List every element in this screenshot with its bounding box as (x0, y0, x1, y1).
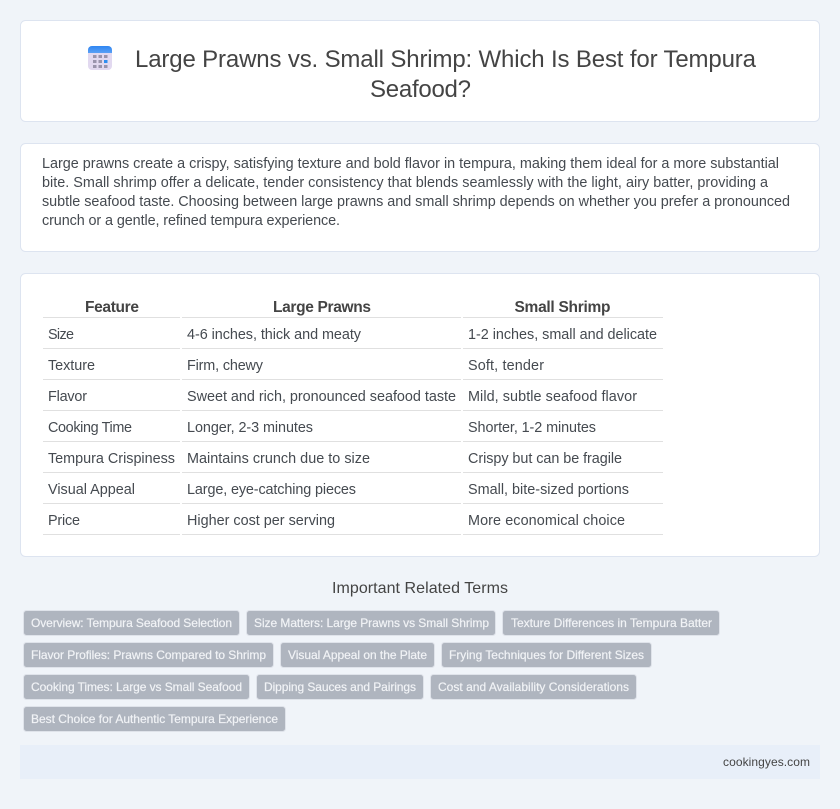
row: texture: Soft, tender (468, 358, 544, 374)
tag: overview: Overview: Tempura Seafood Selection (31, 616, 232, 630)
row: visual appeal: Visual Appeal (48, 482, 135, 498)
tag: frying techniques: Frying Techniques for Different Sizes (449, 648, 644, 662)
tag: best choice: Best Choice for Authentic Tempura Experience (31, 712, 278, 726)
title: Seafood? (370, 76, 471, 103)
row: tempura crispiness (48, 451, 622, 467)
panel: introduction text: Large prawns create a crispy, satisfying texture and bold flavor in tempura, making them ideal for a more substantial (42, 156, 779, 172)
row: texture: Firm, chewy (187, 358, 264, 374)
tag: cost and availability (430, 674, 636, 700)
panel: header (20, 20, 820, 122)
row: flavor: Mild, subtle seafood flavor (468, 389, 637, 405)
icon: calendar (88, 46, 112, 70)
row: price: More economical choice (468, 513, 625, 529)
tag: visual appeal: Visual Appeal on the Plate (288, 648, 427, 662)
related term tags (24, 610, 720, 732)
row: size: 1-2 inches, small and delicate (468, 327, 657, 343)
row: cooking time (48, 420, 596, 436)
panel: introduction text: subtle seafood taste. Choosing between large prawns and small shrimp depends on whether you prefer a pronounced (42, 194, 790, 210)
row: cooking time: Longer, 2-3 minutes (187, 420, 313, 436)
footer bar (20, 745, 820, 779)
row: flavor (48, 389, 637, 405)
row: texture (48, 358, 544, 374)
heading: related terms: Important Related Terms (332, 580, 508, 597)
tag: dipping sauces (256, 674, 424, 700)
row: price: Higher cost per serving (187, 513, 335, 529)
title (135, 46, 757, 103)
table header: Large Prawns (273, 299, 371, 316)
row: price (48, 513, 625, 529)
row: flavor: Flavor (48, 389, 87, 405)
row: cooking time: Cooking Time (48, 420, 132, 436)
tag: cooking times: Cooking Times: Large vs Small Seafood (31, 680, 242, 694)
table header: Feature (85, 299, 139, 316)
table header (85, 299, 610, 316)
tag: size matters (246, 610, 496, 636)
row: visual appeal: Large, eye-catching pieces (187, 482, 356, 498)
row: size (48, 327, 657, 343)
tag: texture differences (502, 610, 720, 636)
tag: overview (24, 610, 240, 636)
tag: flavor profiles: Flavor Profiles: Prawns Compared to Shrimp (31, 648, 266, 662)
row: size: Size (48, 327, 74, 343)
panel: introduction text: crunch or a gentle, refined tempura experience. (42, 213, 340, 229)
row: visual appeal (48, 482, 629, 498)
tag: dipping sauces: Dipping Sauces and Pairings (264, 680, 416, 694)
tag: cooking times (24, 674, 250, 700)
row: cooking time: Shorter, 1-2 minutes (468, 420, 596, 436)
table header: Small Shrimp (514, 299, 610, 316)
row: texture: Texture (48, 358, 95, 374)
row: tempura crispiness: Crispy but can be fragile (468, 451, 622, 467)
row: flavor: Sweet and rich, pronounced seafood taste (187, 389, 456, 405)
tag: visual appeal (280, 642, 434, 668)
tag: flavor profiles (24, 642, 274, 668)
table row lines (43, 317, 663, 535)
tag: best choice (24, 706, 286, 732)
panel: introduction text: bite. Small shrimp offer a delicate, tender consistency that blends seamlessly with the light, airy batter, providing a (42, 175, 768, 191)
tag: size matters: Size Matters: Large Prawns vs Small Shrimp (254, 616, 489, 630)
tag: texture differences: Texture Differences in Tempura Batter (511, 616, 712, 630)
title: Large Prawns vs. Small Shrimp: Which Is Best for Tempura (135, 46, 757, 73)
row: price: Price (48, 513, 80, 529)
tag: cost and availability: Cost and Availability Considerations (438, 680, 629, 694)
row: tempura crispiness: Maintains crunch due to size (187, 451, 370, 467)
row: tempura crispiness: Tempura Crispiness (48, 451, 175, 467)
row: visual appeal: Small, bite-sized portions (468, 482, 629, 498)
footer bar: cookingyes.com (723, 755, 810, 769)
panel: comparison table (20, 274, 820, 556)
tag: frying techniques (442, 642, 652, 668)
panel: introduction text (20, 144, 820, 252)
row: size: 4-6 inches, thick and meaty (187, 327, 362, 343)
